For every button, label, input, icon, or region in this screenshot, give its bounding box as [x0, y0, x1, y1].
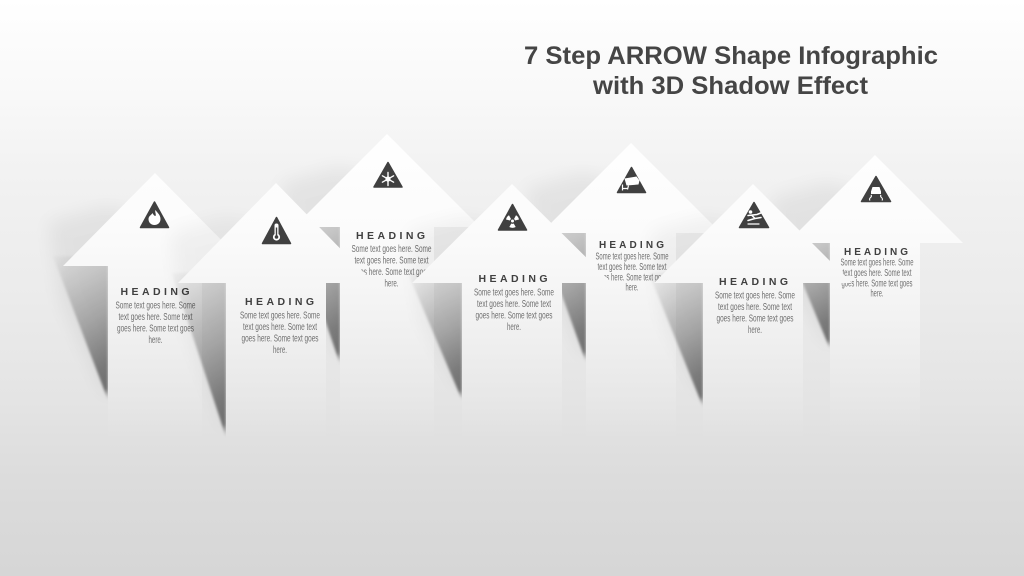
- text block 6: [715, 276, 795, 336]
- title: [524, 42, 938, 100]
- text block 6: Some text goes here. Some: [715, 290, 795, 302]
- text block 3: text goes here. Some text: [354, 254, 429, 266]
- arrow step 2: [170, 183, 374, 576]
- arrow step 3: [280, 134, 480, 576]
- text block 5: here.: [626, 282, 638, 294]
- text block 7: HEADING: [844, 247, 908, 258]
- text block 3: here.: [384, 278, 398, 290]
- icon: snowflake: [374, 162, 402, 187]
- text block 3: HEADING: [356, 230, 425, 242]
- arrow step 4: [408, 184, 612, 576]
- text block 4: Some text goes here. Some: [474, 286, 554, 298]
- text block 3: Some text goes here. Some: [352, 243, 432, 255]
- text block 7: here.: [870, 288, 884, 300]
- text block 4: here.: [507, 321, 521, 333]
- text block 4: HEADING: [478, 273, 548, 285]
- text block 2: Some text goes here. Some: [240, 310, 320, 322]
- icon: security camera: [618, 168, 646, 192]
- icon: flame: [140, 202, 168, 228]
- text block 7: [840, 247, 914, 300]
- text block 4: goes here. Some text goes: [476, 310, 552, 322]
- arrow step 7: [770, 155, 963, 576]
- text block 2: [240, 296, 320, 356]
- text block 1: goes here. Some text goes: [117, 322, 194, 334]
- icon: radiation: [498, 204, 526, 230]
- text block 4: [474, 273, 554, 333]
- text block 6: text goes here. Some text: [718, 301, 792, 313]
- text block 7: text goes here. Some text: [842, 268, 912, 279]
- text block 1: HEADING: [120, 286, 190, 298]
- text block 1: Some text goes here. Some: [116, 300, 196, 312]
- arrow step 5: [526, 143, 721, 576]
- arrow step 6: [649, 184, 852, 576]
- icon: skidding car: [862, 176, 890, 202]
- text block 6: goes here. Some text goes: [716, 312, 794, 324]
- text block 6: here.: [748, 324, 762, 336]
- text block 2: HEADING: [245, 296, 314, 308]
- text block 1: text goes here. Some text: [118, 311, 193, 323]
- text block 6: HEADING: [719, 276, 788, 288]
- title: with 3D Shadow Effect: [592, 72, 869, 100]
- icon: thermometer: [262, 218, 290, 244]
- text block 1: here.: [148, 334, 162, 346]
- icon: slipping person: [740, 202, 768, 228]
- text block 7: goes here. Some text goes: [842, 278, 913, 290]
- arrow step 1: [48, 173, 247, 576]
- text block 5: HEADING: [599, 240, 664, 251]
- text block 2: here.: [273, 344, 287, 356]
- text block 2: goes here. Some text goes: [242, 332, 318, 344]
- text block 2: text goes here. Some text: [243, 321, 317, 333]
- text block 3: [352, 230, 432, 290]
- text block 5: goes here. Some text goes: [596, 272, 668, 284]
- title: 7 Step ARROW Shape Infographic: [524, 42, 938, 70]
- text block 5: [596, 240, 669, 294]
- text block 3: goes here. Some text goes: [353, 266, 430, 278]
- text block 7: Some text goes here. Some: [840, 258, 914, 268]
- text block 5: Some text goes here. Some: [596, 252, 669, 262]
- text block 1: [116, 286, 196, 346]
- text block 4: text goes here. Some text: [477, 298, 551, 310]
- text block 5: text goes here. Some text: [598, 262, 667, 273]
